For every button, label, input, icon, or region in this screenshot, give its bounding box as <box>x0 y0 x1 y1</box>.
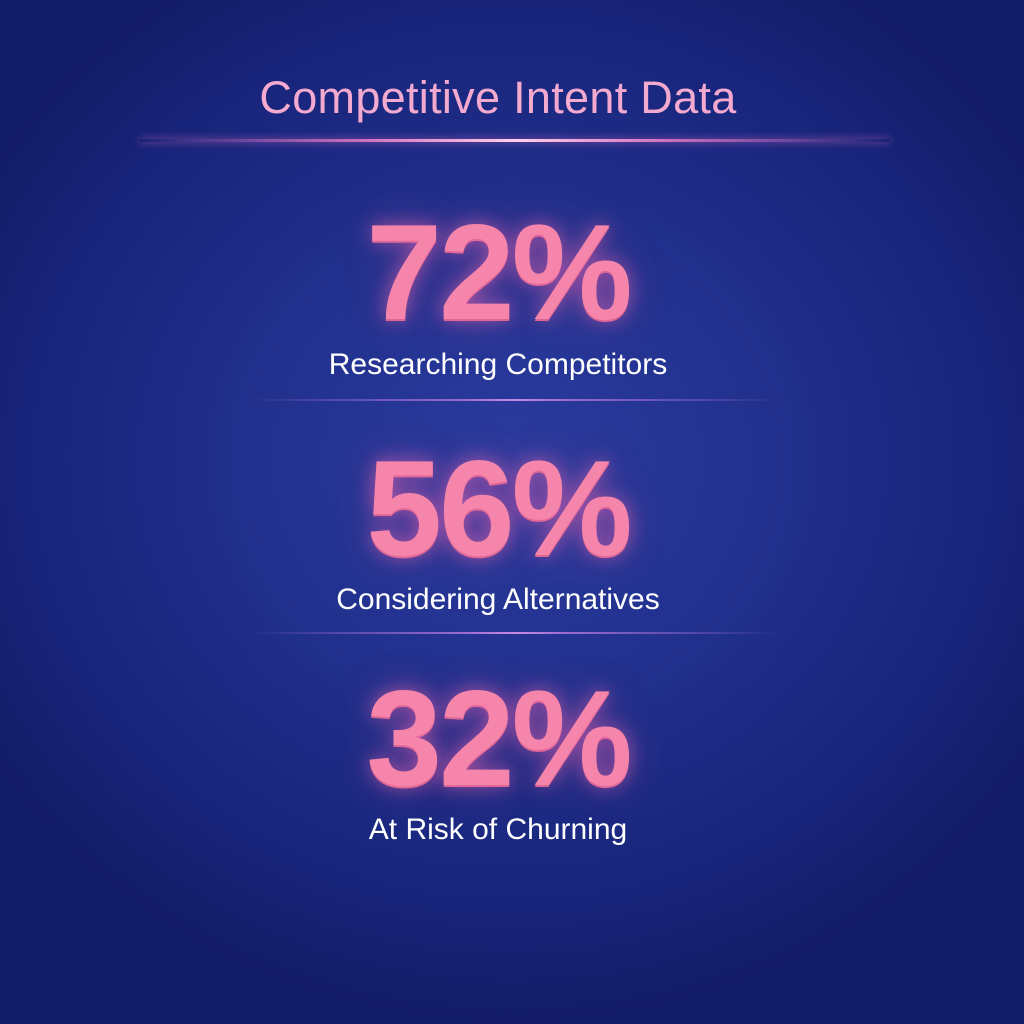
stat 1 number: 72% <box>366 196 630 348</box>
stat 1 label: Researching Competitors <box>329 348 667 381</box>
stat 2 label: Considering Alternatives <box>336 583 660 616</box>
title underline glow <box>140 139 890 142</box>
stat 2 number: 56% <box>366 432 630 584</box>
title: Competitive Intent Data <box>259 72 737 123</box>
stat 3 number: 32% <box>366 662 630 814</box>
stat 3 label: At Risk of Churning <box>369 813 627 846</box>
